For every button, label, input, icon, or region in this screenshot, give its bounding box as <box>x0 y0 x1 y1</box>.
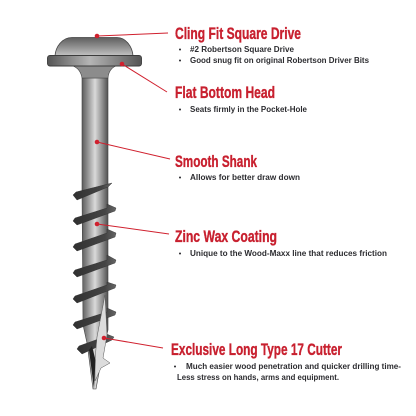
heading: Smooth Shank <box>175 153 258 171</box>
screw shank and core <box>82 78 108 389</box>
bullet list: Good snug fit on original Robertson Driver Bits <box>190 56 370 65</box>
bullet text: Less stress on hands, arms and equipment. <box>177 373 339 382</box>
callout line: smooth shank <box>95 140 170 159</box>
callout line: type 17 cutter <box>102 336 163 348</box>
bullet text: Allows for better draw down <box>190 173 300 182</box>
thread turns <box>73 183 116 354</box>
screw head flange <box>48 56 142 66</box>
heading: Cling Fit Square Drive <box>175 25 301 43</box>
bullet list <box>179 45 370 65</box>
screw neck <box>73 66 116 78</box>
section: flat bottom head <box>175 84 308 114</box>
bullet text: Seats firmly in the Pocket-Hole <box>190 105 308 114</box>
callout line: cling fit square drive <box>95 33 168 38</box>
bullet list: #2 Robertson Square Drive <box>190 45 295 54</box>
section: exclusive long type 17 cutter <box>171 341 401 382</box>
bullet text <box>174 362 401 382</box>
bullet text: Unique to the Wood-Maxx line that reduces friction <box>190 249 387 258</box>
heading: Flat Bottom Head <box>175 84 275 102</box>
section: zinc wax coating <box>175 228 387 258</box>
type 17 cutter blade <box>95 295 110 381</box>
callout line: zinc wax coating <box>95 222 169 234</box>
bullet text: Much easier wood penetration and quicker drilling time- <box>186 362 401 371</box>
section: smooth shank <box>175 153 300 182</box>
heading: Zinc Wax Coating <box>175 228 277 246</box>
section: cling fit square drive <box>175 25 370 65</box>
heading: Exclusive Long Type 17 Cutter <box>171 341 342 359</box>
screw illustration <box>48 38 142 389</box>
screw head dome <box>55 38 133 56</box>
screw tip shadow <box>89 346 96 389</box>
callout line: flat bottom head <box>120 62 167 92</box>
